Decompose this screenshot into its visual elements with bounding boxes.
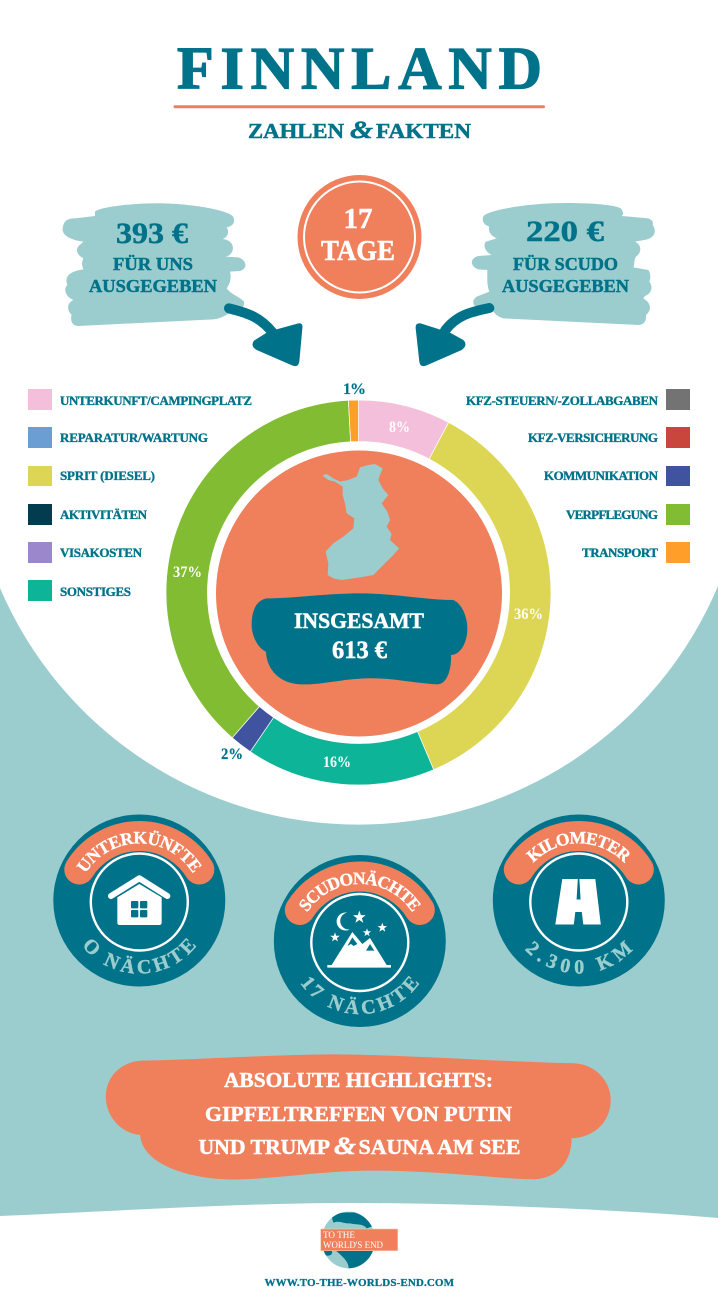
chart percentage labels: 1 % (343, 381, 366, 398)
chart percentage labels: 2% (221, 746, 243, 763)
highlights banner: GIPFELTREFFEN VON PUTIN (205, 1102, 512, 1126)
legend left (28, 389, 252, 601)
brush blob right (472, 203, 655, 325)
legend right: VERPFLEGUNG (566, 507, 658, 522)
total banner (252, 593, 467, 684)
badge: scudonächte (274, 855, 446, 1027)
panel: für scudo ausgegeben: AUSGEGEBEN (502, 276, 629, 296)
badge: scudonächte: SCUDONÄCHTE (299, 870, 421, 912)
badge: 17 tage: TAGE (321, 236, 395, 267)
badge: scudonächte: 17 NÄCHTE (300, 976, 420, 1014)
highlights banner: SAUNA AM SEE (358, 1135, 520, 1159)
legend right: KFZ-VERSICHERUNG (528, 430, 658, 445)
logo: to the world's end: TO THE (323, 1231, 355, 1241)
panel: für scudo ausgegeben: 220 € (526, 215, 604, 248)
legend right: KFZ-STEUERN/-ZOLLABGABEN (466, 393, 659, 408)
chart percentage labels: 16% (323, 754, 351, 771)
highlights banner: ABSOLUTE HIGHLIGHTS: (224, 1068, 493, 1092)
chart percentage labels: 8% (389, 419, 410, 436)
badge: 17 tage (298, 175, 422, 299)
panel: für uns ausgegeben: AUSGEGEBEN (89, 276, 217, 296)
highlights banner (106, 1054, 611, 1179)
arrow right (416, 308, 489, 366)
logo: to the world's end: WORLD'S END (323, 1241, 383, 1251)
map of finland (322, 464, 399, 580)
brush blob left (63, 203, 245, 326)
legend right: KOMMUNIKATION (544, 468, 659, 483)
title: FINNLAND (177, 36, 542, 102)
title underline (174, 105, 545, 108)
panel: für scudo ausgegeben: FÜR SCUDO (513, 254, 618, 274)
chart percentage labels (173, 381, 543, 771)
total banner: INSGESAMT (294, 608, 424, 633)
badge: kilometer (492, 814, 665, 986)
legend right: TRANSPORT (582, 545, 658, 560)
logo: to the world's end (320, 1212, 398, 1269)
icon: house (111, 878, 167, 925)
badge: unterkünfte: O NÄCHTE (84, 938, 196, 974)
globe (324, 1212, 373, 1268)
subtitle (248, 117, 471, 144)
panel: für uns ausgegeben: 393 € (116, 217, 188, 250)
panel: für scudo ausgegeben (472, 203, 655, 325)
background (0, 586, 718, 1218)
chart centre circle (216, 450, 502, 736)
badge: unterkünfte (53, 814, 226, 986)
highlights banner: & (334, 1133, 357, 1160)
legend left: REPARATUR/WARTUNG (60, 430, 208, 445)
panel: für uns ausgegeben: FÜR UNS (113, 254, 193, 274)
highlights banner: UND TRUMP (198, 1135, 330, 1159)
subtitle: ZAHLEN (248, 119, 344, 143)
arrow left (229, 308, 302, 366)
panel: für uns ausgegeben (63, 203, 245, 326)
badge: 17 tage: 17 (344, 203, 372, 235)
legend left: SPRIT (DIESEL) (60, 468, 155, 483)
icon: road (555, 879, 601, 924)
subtitle: FAKTEN (376, 119, 471, 143)
badge: unterkünfte: UNTERKÜNFTE (76, 830, 202, 873)
donut chart (166, 400, 551, 785)
total banner: 613 € (332, 637, 387, 664)
badge: kilometer: 2.300 KM (524, 940, 634, 974)
legend left: UNTERKUNFT/CAMPINGPLATZ (60, 393, 252, 408)
chart percentage labels: 37% (173, 564, 202, 581)
subtitle: & (350, 117, 374, 144)
legend left: VISAKOSTEN (60, 545, 143, 560)
website url: WWW.TO-THE-WORLDS-END.COM (264, 1277, 455, 1289)
chart percentage labels: 36% (514, 606, 543, 623)
legend right (466, 389, 690, 563)
legend left: SONSTIGES (60, 584, 131, 599)
legend left: AKTIVITÄTEN (60, 507, 148, 522)
icon: mountains and night sky (327, 911, 391, 968)
badge: kilometer: KILOMETER (526, 832, 630, 864)
